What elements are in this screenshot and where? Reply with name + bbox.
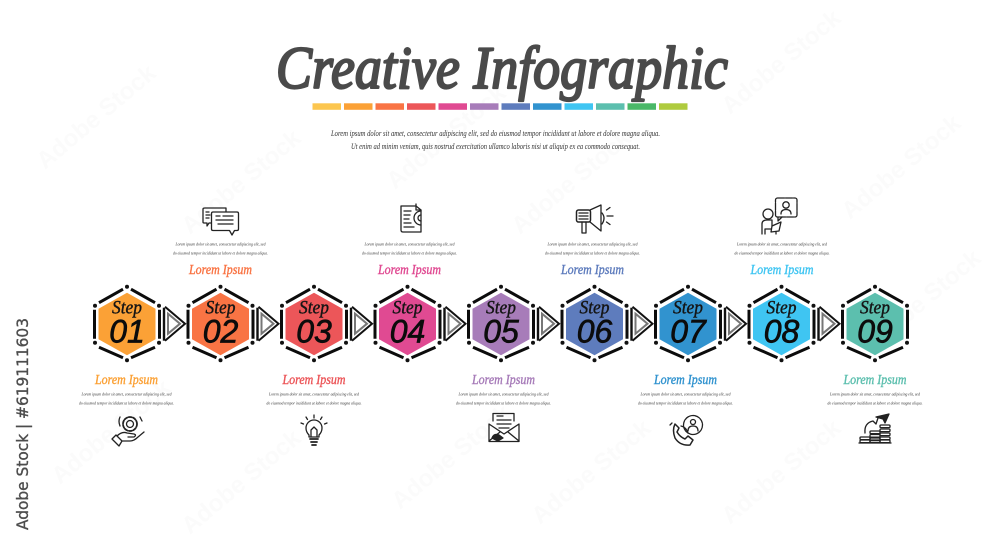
arrow 4 xyxy=(444,307,466,341)
step 7 hexagon xyxy=(654,285,722,362)
icon: phone with contact xyxy=(670,416,702,445)
step 4 hexagon xyxy=(374,285,442,362)
text block: step 1: do eiusmod tempor incididunt ut labore et dolore magna aliqua. xyxy=(79,400,174,406)
step 5 hexagon xyxy=(467,285,535,362)
watermark: Adobe Stock xyxy=(387,399,517,515)
watermark: Adobe Stock xyxy=(717,414,847,530)
arrow 8 xyxy=(818,307,840,341)
text block: step 6: Lorem Ipsum xyxy=(560,263,624,278)
step 5 hexagon: 05 xyxy=(483,314,519,350)
step 1 hexagon xyxy=(93,285,161,362)
step 6 hexagon xyxy=(560,285,628,362)
text block: step 4: do eiusmod tempor incididunt ut labore et dolore magna aliqua. xyxy=(362,250,457,256)
text block: step 1: Lorem ipsum dolor sit amet, consectetur adipiscing elit, sed xyxy=(81,392,172,398)
watermark: Adobe Stock xyxy=(47,374,177,490)
step 6 hexagon: Step xyxy=(580,298,610,319)
arrow 2 xyxy=(258,307,278,341)
text block: step 3: do eiusmod tempor incididunt ut labore et dolore magna aliqua. xyxy=(266,400,362,406)
step 1 hexagon: Step xyxy=(112,298,142,319)
watermark: Adobe Stock xyxy=(837,109,967,225)
watermark: Adobe Stock xyxy=(717,4,847,120)
text block: step 9 xyxy=(828,373,922,406)
step 9 hexagon xyxy=(841,285,909,362)
icon: open envelope xyxy=(489,414,519,442)
step 8 hexagon: 08 xyxy=(764,314,800,350)
text block: step 9: Lorem Ipsum xyxy=(843,373,906,388)
watermark: Adobe Stock xyxy=(32,59,162,175)
text block: step 3: Lorem ipsum dolor sit amet, consectetur adipiscing elit, sed xyxy=(268,392,360,398)
step 3 hexagon: 03 xyxy=(296,314,332,350)
icon: hand holding gear xyxy=(112,417,144,446)
text block: step 1 xyxy=(79,373,174,406)
text block: step 7: Lorem ipsum dolor sit amet, consectetur adipiscing elit, sed xyxy=(640,392,731,398)
step 9 hexagon: 09 xyxy=(857,314,893,350)
step 7 hexagon: 07 xyxy=(670,314,707,350)
arrow 5 xyxy=(538,307,559,341)
text block: step 8: do eiusmod tempor incididunt ut labore et dolore magna aliqua. xyxy=(734,250,830,256)
text block: step 2: Lorem ipsum dolor sit amet, consectetur adipiscing elit, sed xyxy=(175,242,266,248)
text block: step 6 xyxy=(545,242,640,278)
watermark: Adobe Stock xyxy=(177,424,307,540)
icon: person with speech bubble xyxy=(762,198,797,234)
text block: step 4 xyxy=(362,242,457,278)
text block: step 7: Lorem Ipsum xyxy=(653,373,717,388)
watermark: Adobe Stock xyxy=(382,79,512,195)
text block: step 6: do eiusmod tempor incididunt ut labore et dolore magna aliqua. xyxy=(545,250,640,256)
subtitle: Ut enim ad minim veniam, quis nostrud exercitation ullamco laboris nisi ut aliquip ex ea commodo consequat. xyxy=(351,141,640,151)
step 6 hexagon: 06 xyxy=(577,314,612,350)
subtitle: Lorem ipsum dolor sit amet, consectetur adipiscing elit, sed do eiusmod tempor incididunt ut labore et dolore magna aliqua. xyxy=(330,128,660,138)
step 9 hexagon: Step xyxy=(860,298,890,319)
step 3 hexagon: Step xyxy=(299,298,329,319)
icon: megaphone xyxy=(576,205,613,233)
arrow 6 xyxy=(632,307,652,341)
text block: step 2: Lorem Ipsum xyxy=(188,263,252,278)
colour bar strip xyxy=(312,103,688,110)
icon: document with gear xyxy=(401,204,421,232)
step 5 hexagon: Step xyxy=(486,298,516,319)
watermark: Adobe Stock xyxy=(507,124,637,240)
text block: step 1: Lorem Ipsum xyxy=(94,373,158,388)
icon: chat bubbles xyxy=(203,208,238,235)
title: Creative Infographic xyxy=(276,35,728,101)
text block: step 4: Lorem Ipsum xyxy=(377,263,441,278)
text block: step 8 xyxy=(734,242,830,278)
text block: step 9: Lorem ipsum dolor sit amet, consectetur adipiscing elit, sed xyxy=(829,392,921,398)
step 1 hexagon: 01 xyxy=(109,314,145,350)
step 8 hexagon: Step xyxy=(766,298,796,319)
text block: step 9: do eiusmod tempor incididunt ut labore et dolore magna aliqua. xyxy=(828,400,922,406)
arrow 3 xyxy=(351,307,372,341)
step 8 hexagon xyxy=(748,285,816,362)
step 2 hexagon: 02 xyxy=(203,314,238,350)
watermark: Adobe Stock xyxy=(857,244,987,360)
watermark: Adobe Stock xyxy=(177,124,307,240)
subtitle xyxy=(330,128,660,151)
step 4 hexagon: 04 xyxy=(390,314,425,350)
text block: step 5: Lorem Ipsum xyxy=(471,373,535,388)
step 7 hexagon: Step xyxy=(673,298,703,319)
arrow 7 xyxy=(725,307,746,341)
step 3 hexagon xyxy=(280,285,348,362)
icon: coin stacks with paper plane xyxy=(859,414,891,443)
step 2 hexagon: Step xyxy=(206,298,236,319)
icon: light bulb xyxy=(301,415,327,445)
arrow 1 xyxy=(164,307,185,341)
text block: step 5 xyxy=(456,373,551,406)
text block: step 5: Lorem ipsum dolor sit amet, consectetur adipiscing elit, sed xyxy=(458,392,549,398)
text block: step 7: do eiusmod tempor incididunt ut labore et dolore magna aliqua. xyxy=(638,400,733,406)
watermark: Adobe Stock xyxy=(527,414,657,530)
text block: step 2: do eiusmod tempor incididunt ut labore et dolore magna aliqua. xyxy=(173,250,268,256)
text block: step 6: Lorem ipsum dolor sit amet, consectetur adipiscing elit, sed xyxy=(547,242,638,248)
text block: step 5: do eiusmod tempor incididunt ut labore et dolore magna aliqua. xyxy=(456,400,551,406)
side credit text: Adobe Stock | #619111603 xyxy=(13,318,32,530)
text block: step 3: Lorem Ipsum xyxy=(282,373,346,388)
step 2 hexagon xyxy=(186,285,254,362)
text block: step 7 xyxy=(638,373,733,406)
text block: step 4: Lorem ipsum dolor sit amet, consectetur adipiscing elit, sed xyxy=(364,242,455,248)
text block: step 8: Lorem Ipsum xyxy=(750,263,814,278)
text block: step 2 xyxy=(173,242,268,278)
step 4 hexagon: Step xyxy=(392,298,422,319)
text block: step 8: Lorem ipsum dolor sit amet, consectetur adipiscing elit, sed xyxy=(736,242,828,248)
text block: step 3 xyxy=(266,373,362,406)
